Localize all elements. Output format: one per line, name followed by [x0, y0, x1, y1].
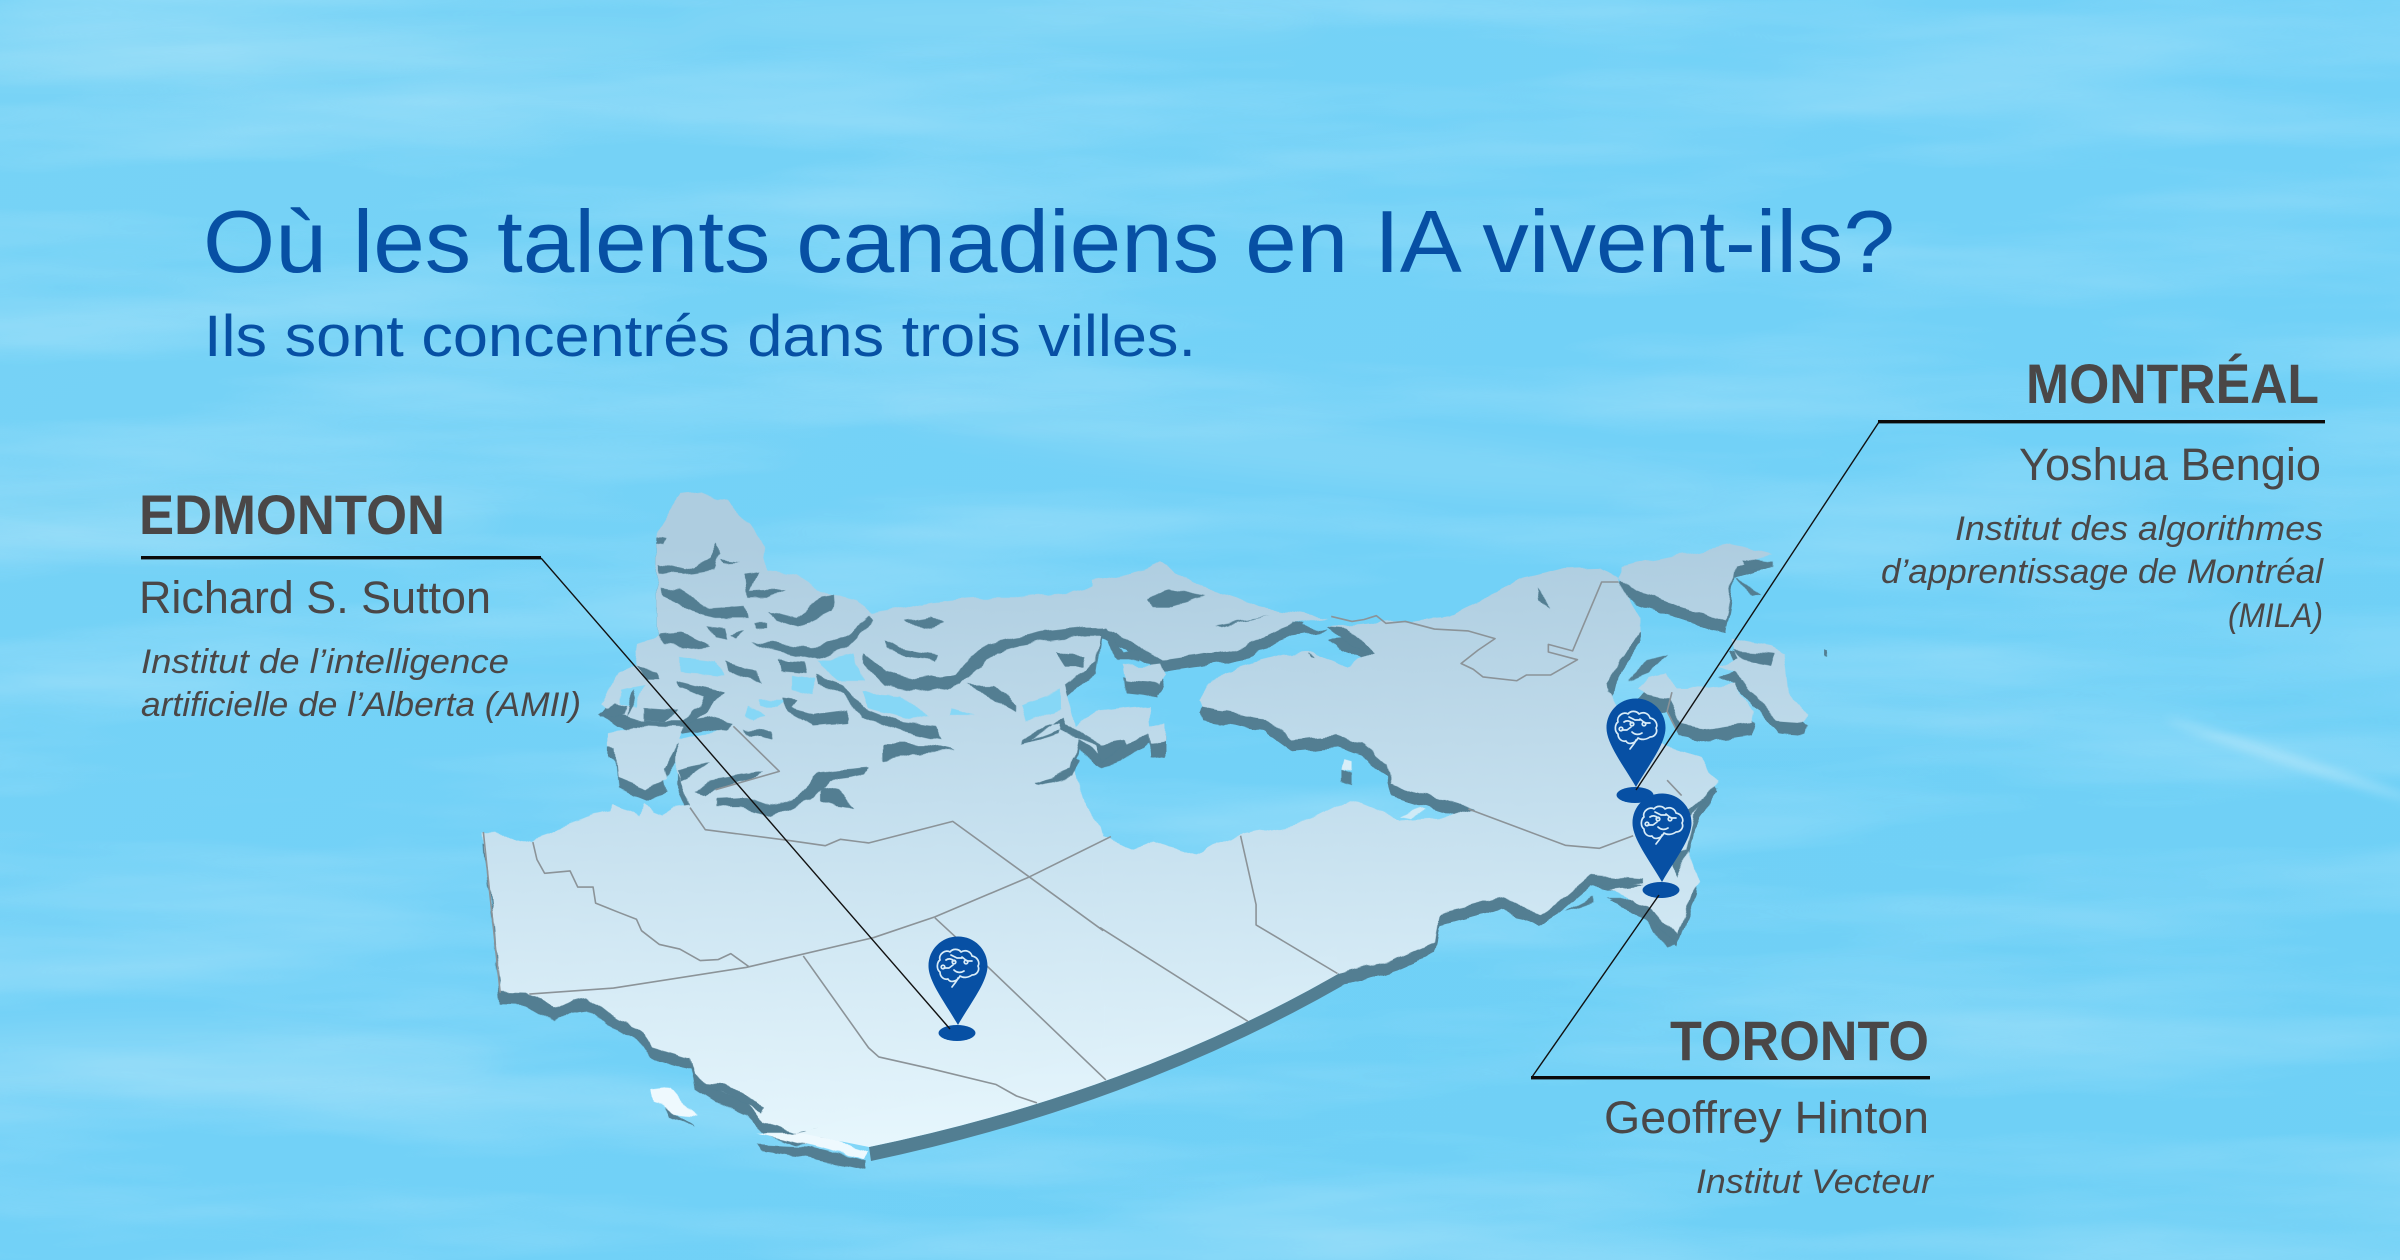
callout: Montréal: [1636, 352, 2325, 790]
map of Canada (3D extruded): [483, 492, 1829, 1171]
map: provincial borders: [483, 582, 1682, 1103]
icon: brain: [937, 949, 979, 987]
icon: brain: [1641, 806, 1683, 844]
person: Geoffrey Hinton: Geoffrey Hinton: [1604, 1092, 1929, 1143]
city name: Toronto: TORONTO: [1670, 1009, 1929, 1072]
pin: Montréal: [1606, 698, 1666, 803]
connector line: Toronto: [1532, 895, 1659, 1077]
pin: Toronto: [1632, 794, 1692, 898]
icon: brain: [1615, 711, 1657, 749]
connector line: Edmonton: [541, 558, 950, 1029]
institute: AMII: artificielle de l’Alberta (AMII): [141, 686, 581, 724]
institute: MILA: Institut des algorithmes: [1955, 510, 2323, 548]
institute: MILA: [1881, 510, 2324, 635]
institute: Vecteur: Institut Vecteur: [1696, 1163, 1935, 1201]
rule: Toronto: [1531, 1076, 1930, 1079]
rule: Edmonton: [141, 556, 541, 559]
city name: Edmonton: EDMONTON: [139, 483, 445, 546]
map: land masses with extruded shadow and channels: [483, 492, 1829, 1171]
city name: Montréal: MONTRÉAL: [2026, 352, 2319, 415]
subtitle: Ils sont concentrés dans trois villes.: [204, 304, 1196, 369]
person: Richard S. Sutton: Richard S. Sutton: [139, 572, 491, 623]
person: Yoshua Bengio: Yoshua Bengio: [2019, 439, 2321, 490]
connector line: Montréal: [1636, 422, 1879, 790]
institute: MILA: (MILA): [2228, 597, 2323, 635]
institute: MILA: d’apprentissage de Montréal: [1881, 553, 2324, 591]
map: smooth southern coastal arc: [800, 945, 1342, 1161]
callout: Edmonton: [139, 483, 950, 1029]
institute: AMII: [141, 643, 581, 724]
pin: Edmonton: [928, 936, 988, 1041]
rule: Montréal: [1878, 420, 2325, 423]
callout: Toronto: [1531, 895, 1935, 1201]
title: Où les talents canadiens en IA vivent-ils?: [203, 192, 1895, 291]
institute: AMII: Institut de l’intelligence: [141, 643, 509, 681]
